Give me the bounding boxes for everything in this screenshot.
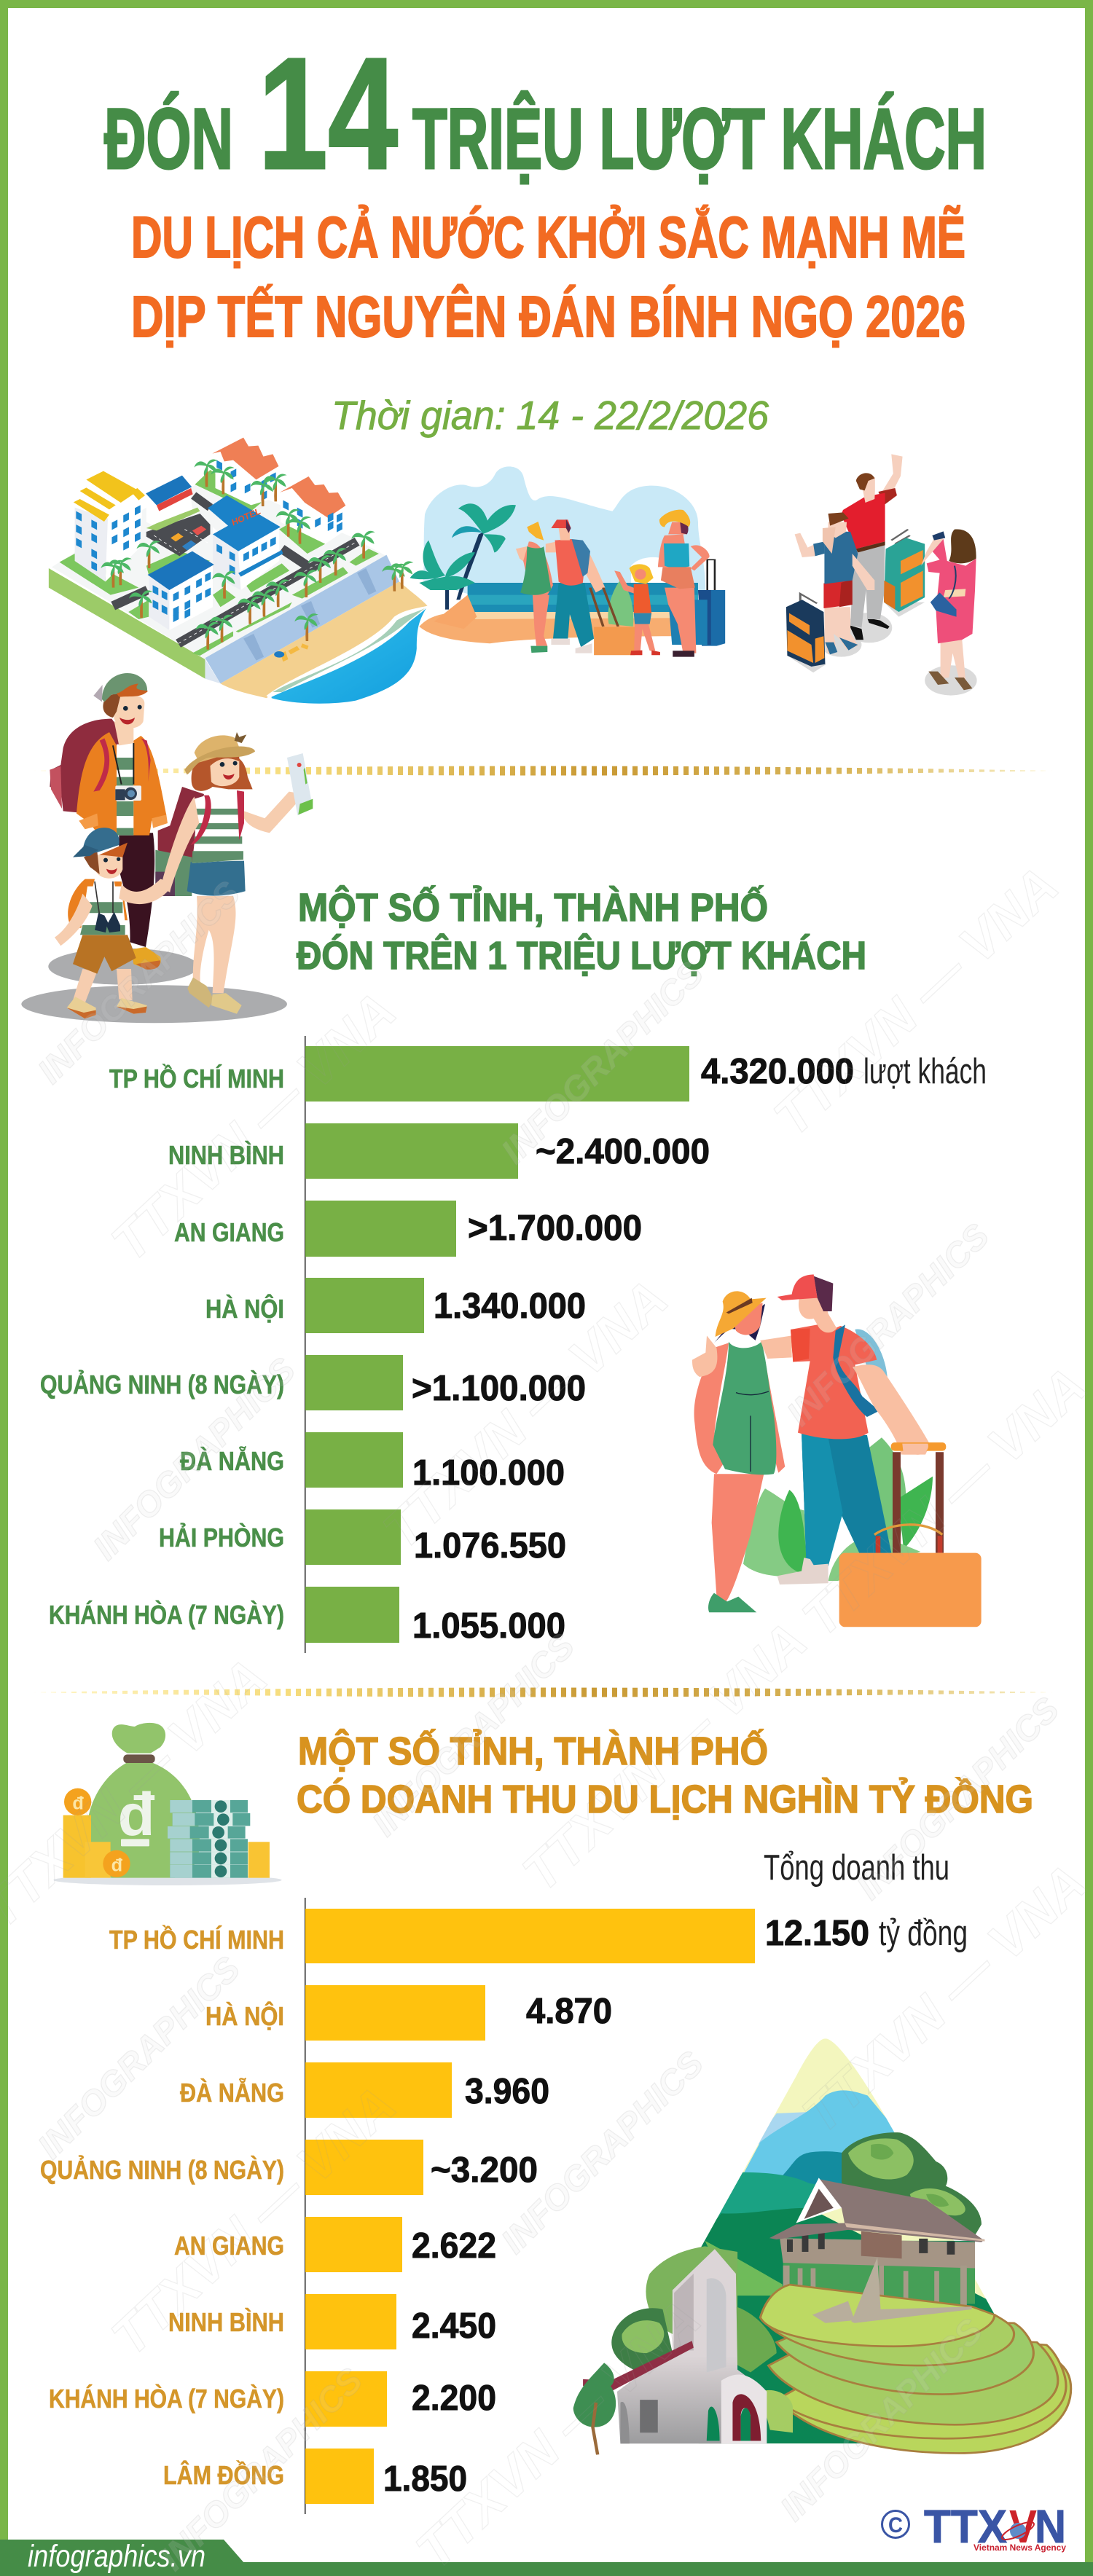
bar: An Giang: 2.622 <box>412 2226 496 2266</box>
text: INFOGRAPHICS <box>850 1690 1067 1907</box>
illustration: money bag <box>53 1723 282 1885</box>
bar: TP Hồ Chí Minh <box>109 1046 987 1102</box>
bar: An Giang: AN GIANG <box>174 2231 284 2261</box>
bar: Ninh Bình <box>168 2294 496 2349</box>
church <box>583 2249 767 2443</box>
bar: Quảng Ninh: ~3.200 <box>431 2151 538 2190</box>
illustration: hiking family <box>21 673 313 1023</box>
globe <box>1000 2519 1036 2542</box>
bar: Hà Nội <box>205 1278 586 1333</box>
bar: TP Hồ Chí Minh <box>109 1909 968 1963</box>
bar: Ninh Bình <box>168 1123 710 1179</box>
chart caption: Tổng doanh thu <box>764 1848 949 1888</box>
bar: Hà Nội: 4.870 <box>526 1992 612 2031</box>
woman taking photo <box>921 529 976 690</box>
man in red tee <box>546 519 605 653</box>
illustration: tourists at airport <box>786 454 977 696</box>
copyright symbol <box>882 2510 909 2538</box>
bar: Hà Nội: HÀ NỘI <box>205 1293 284 1324</box>
bar: Đà Nẵng <box>180 1432 565 1493</box>
illustration: beach holiday family <box>410 466 725 657</box>
bar: Khánh Hòa: KHÁNH HÒA (7 NGÀY) <box>49 1599 284 1630</box>
bar: Đà Nẵng <box>180 2062 549 2118</box>
bar: TP Hồ Chí Minh: TP HỒ CHÍ MINH <box>109 1063 284 1093</box>
bar: Lâm Đồng: LÂM ĐỒNG <box>163 2459 284 2490</box>
bar: TP Hồ Chí Minh: 4.320.000 <box>701 1052 854 1091</box>
divider 1 <box>33 763 1053 778</box>
text: TTXVN — VNA <box>101 981 407 1273</box>
bag <box>87 1723 200 1878</box>
text: INFOGRAPHICS <box>153 2361 370 2576</box>
bar chart: visitors <box>40 1036 987 1653</box>
bar: Quảng Ninh: QUẢNG NINH (8 NGÀY) <box>40 1370 284 1399</box>
axis <box>305 1036 306 1653</box>
ocean <box>267 606 428 704</box>
divider 2 <box>33 1685 1053 1700</box>
bar: An Giang: >1.700.000 <box>468 1209 642 1248</box>
man <box>692 1274 931 1585</box>
website: infographics.vn <box>28 2539 205 2574</box>
parked cars <box>171 533 184 541</box>
banknote stacks <box>168 1800 250 1878</box>
steps <box>812 2301 855 2323</box>
bar: Ninh Bình: 2.450 <box>412 2306 496 2346</box>
trees behind house <box>842 2132 982 2235</box>
woman <box>694 1291 785 1612</box>
orange roof houses <box>215 447 278 505</box>
text: TTXVN — VNA <box>763 856 1070 1147</box>
bar: Hải Phòng: HẢI PHÒNG <box>159 1522 284 1552</box>
section 2 heading <box>297 1729 1033 1821</box>
bar: Quảng Ninh: >1.100.000 <box>412 1369 586 1408</box>
sea <box>468 583 698 612</box>
sand <box>419 612 675 643</box>
bar: TP Hồ Chí Minh: lượt khách <box>863 1052 987 1091</box>
ground shadows <box>21 949 287 1023</box>
camera <box>115 785 141 801</box>
footer bar <box>0 2539 1093 2576</box>
blue building <box>149 566 213 630</box>
section 2 heading: CÓ DOANH THU DU LỊCH NGHÌN TỶ ĐỒNG <box>297 1778 1033 1821</box>
beach <box>221 581 428 698</box>
TTXVN logo <box>882 2500 1066 2553</box>
TTXVN logo: V <box>1009 2500 1037 2553</box>
illustration: isometric seaside city <box>49 438 428 704</box>
bar chart: revenue <box>40 1898 968 2514</box>
illustration: mountain, stilt house, church and terraces <box>573 2033 1071 2454</box>
title line 1: ĐÓN <box>104 91 233 187</box>
axis <box>305 1898 306 2514</box>
bar: TP Hồ Chí Minh: TP HỒ CHÍ MINH <box>109 1924 284 1955</box>
section 1 heading: MỘT SỐ TỈNH, THÀNH PHỐ <box>298 885 768 930</box>
bar: Ninh Bình: ~2.400.000 <box>536 1132 710 1171</box>
roads <box>113 495 357 643</box>
title line 1: 14 <box>258 25 398 203</box>
palm trees <box>410 503 516 610</box>
floor shadows <box>787 602 977 696</box>
date subtitle: Thời gian: 14 - 22/2/2026 <box>332 393 769 438</box>
father <box>50 673 168 970</box>
text: TTXVN — VNA <box>512 1611 818 1903</box>
sea wall <box>205 555 399 683</box>
text: INFOGRAPHICS <box>86 1351 303 1568</box>
text: INFOGRAPHICS <box>31 1949 248 2167</box>
gold coins: đ <box>111 1855 123 1875</box>
bar: An Giang <box>174 2217 496 2272</box>
text: INFOGRAPHICS <box>31 874 248 1091</box>
woman with sun hat <box>658 510 710 657</box>
blue suitcases <box>668 559 725 646</box>
bar: Khánh Hòa <box>49 2371 496 2427</box>
palm trees <box>101 459 413 650</box>
small tree <box>573 2363 616 2427</box>
TTXVN logo: N <box>1035 2500 1066 2553</box>
section 2 heading: MỘT SỐ TỈNH, THÀNH PHỐ <box>298 1729 768 1773</box>
yellow tower <box>75 508 108 581</box>
bar: Quảng Ninh: QUẢNG NINH (8 NGÀY) <box>40 2155 284 2185</box>
text: TTXVN — VNA <box>405 2289 712 2576</box>
bar: Lâm Đồng <box>163 2449 467 2504</box>
leaves <box>743 1437 933 1581</box>
bar: TP Hồ Chí Minh: tỷ đồng <box>879 1914 968 1953</box>
text: INFOGRAPHICS <box>494 2044 711 2261</box>
text: TTXVN — VNA <box>101 2076 407 2367</box>
text: INFOGRAPHICS <box>780 1217 997 1434</box>
child <box>614 564 660 655</box>
shop <box>146 488 192 528</box>
section 1 heading <box>297 885 866 978</box>
illustration: isometric seaside city: HOTEL <box>230 506 262 527</box>
hotel <box>213 527 279 590</box>
bar: An Giang <box>174 1201 642 1257</box>
gold coins <box>63 1788 270 1878</box>
man waving <box>841 454 903 640</box>
section 1 heading: ĐÓN TRÊN 1 TRIỆU LƯỢT KHÁCH <box>297 933 866 978</box>
text: INFOGRAPHICS <box>773 2312 990 2529</box>
text: TTXVN — VNA <box>372 1269 679 1560</box>
bar: Đà Nẵng: 1.100.000 <box>412 1453 565 1493</box>
text: INFOGRAPHICS <box>494 954 711 1171</box>
teal suitcase <box>884 530 925 612</box>
suitcase <box>839 1442 982 1627</box>
bar: Hải Phòng: 1.076.550 <box>414 1526 566 1566</box>
bar: Hà Nội: HÀ NỘI <box>205 2000 284 2031</box>
trees by church <box>611 2246 793 2432</box>
bar: Quảng Ninh <box>40 2140 538 2195</box>
boy with navy suitcase <box>786 512 874 667</box>
sky blob <box>423 466 705 595</box>
son <box>55 828 171 1018</box>
bar: Khánh Hòa: KHÁNH HÒA (7 NGÀY) <box>49 2383 284 2414</box>
text: TTXVN — VNA <box>791 1356 1093 1648</box>
bar: Hà Nội <box>205 1985 612 2041</box>
bar: Khánh Hòa <box>49 1587 565 1646</box>
text: TTXVN — VNA <box>791 1853 1093 2145</box>
bar: Lâm Đồng: 1.850 <box>383 2459 467 2499</box>
bag: đ <box>118 1780 155 1848</box>
bar: Quảng Ninh <box>40 1355 586 1410</box>
woman in green dress <box>516 522 553 653</box>
TTXVN logo: Vietnam News Agency <box>973 2542 1066 2553</box>
bar: Hải Phòng <box>159 1509 566 1566</box>
TTXVN logo: TTX <box>924 2500 1007 2553</box>
text: INFOGRAPHICS <box>365 1627 582 1844</box>
rice terraces <box>760 2285 1071 2453</box>
bar: TP Hồ Chí Minh: 12.150 <box>765 1914 869 1953</box>
bar: Đà Nẵng: ĐÀ NẴNG <box>180 1446 284 1476</box>
bar: Ninh Bình: NINH BÌNH <box>168 2307 284 2337</box>
copyright symbol: C <box>888 2513 903 2537</box>
stilt house <box>769 2178 984 2312</box>
bar: Đà Nẵng: ĐÀ NẴNG <box>180 2078 284 2108</box>
mountain layers <box>692 2033 1004 2446</box>
bag and plants <box>590 581 635 655</box>
bar: Khánh Hòa: 2.200 <box>412 2379 496 2418</box>
title <box>104 25 987 349</box>
mother <box>155 732 313 1014</box>
bar: An Giang: AN GIANG <box>174 1217 284 1247</box>
bar: Hà Nội: 1.340.000 <box>434 1287 586 1326</box>
bar: Khánh Hòa: 1.055.000 <box>412 1606 565 1646</box>
illustration: couple with suitcase <box>692 1274 982 1627</box>
gold coins: đ <box>72 1793 84 1813</box>
bar: Đà Nẵng: 3.960 <box>465 2072 549 2111</box>
bar: Ninh Bình: NINH BÌNH <box>168 1140 284 1170</box>
title line 1 <box>104 25 987 203</box>
